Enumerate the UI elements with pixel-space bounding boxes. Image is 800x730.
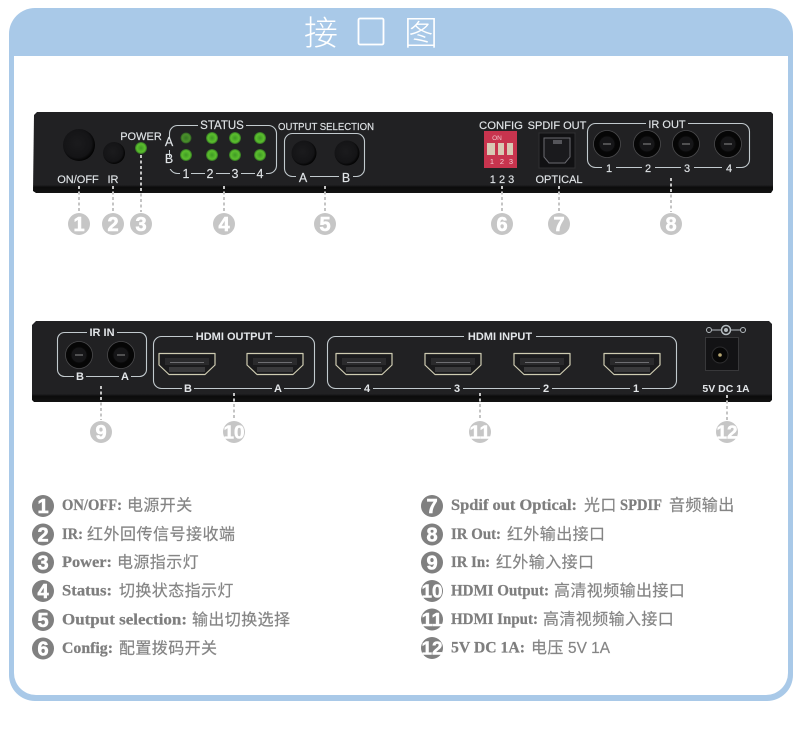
callouts: leader lines [79, 155, 727, 420]
callouts: numbered markers [68, 213, 738, 444]
legend item 2: IR: [62, 526, 83, 543]
group: status LEDs: 1 [183, 167, 190, 181]
legend: left column [32, 495, 290, 660]
legend item 1: ON/OFF: [62, 497, 122, 514]
group: HDMI output [154, 331, 314, 395]
group: status LEDs: A [165, 135, 174, 149]
group: HDMI input: 3 [454, 383, 460, 395]
callouts: numbered markers: 10 [224, 422, 244, 442]
callouts: numbered markers: 2 [107, 214, 119, 236]
legend item 3: 电源指示灯 [117, 554, 199, 572]
legend item 4: 4 [37, 581, 49, 603]
callouts: numbered markers: 12 [716, 422, 738, 442]
group: IR out: 2 [645, 163, 651, 175]
legend item 12: 电压 [531, 639, 564, 657]
title: 接 [304, 15, 338, 53]
group: HDMI output: B [184, 383, 192, 395]
legend item 2 [32, 524, 236, 546]
legend item 7: SPDIF [620, 497, 662, 514]
legend item 8 [421, 524, 605, 546]
group: status LEDs [162, 120, 276, 181]
legend item 7: 音频输出 [669, 496, 735, 514]
group: IR in [58, 327, 146, 383]
legend item 6: 6 [37, 638, 49, 660]
legend item 6 [32, 638, 217, 660]
switch: config: 2 [500, 157, 504, 166]
group: output selection: B [342, 171, 350, 185]
legend item 3: Power: [62, 554, 112, 571]
port: spdif optical: SPDIF OUT [528, 120, 587, 132]
panel: front device [33, 112, 773, 193]
switch: config: 3 [509, 157, 513, 166]
port: DC power: 5V DC 1A [702, 383, 750, 395]
legend item 10 [421, 580, 685, 602]
callouts: numbered markers: 7 [553, 214, 565, 236]
group: output selection: OUTPUT SELECTION [278, 121, 374, 133]
legend item 6: Config: [62, 640, 113, 657]
legend item 1: 电源开关 [127, 496, 193, 514]
legend item 7 [421, 495, 735, 518]
legend item 7: 7 [426, 496, 438, 518]
group: HDMI output: A [274, 383, 282, 395]
legend item 11: HDMI Input: [451, 611, 538, 628]
port: DC power [702, 326, 750, 395]
group: IR out: 1 [606, 163, 612, 175]
legend item 3: 3 [37, 552, 49, 574]
legend item 5: Output selection: [62, 612, 187, 628]
group: IR in: B [76, 371, 84, 383]
callouts: numbered markers: 6 [496, 214, 508, 236]
group: output selection [278, 121, 374, 185]
group: HDMI input: HDMI INPUT [468, 331, 532, 343]
group: IR out: 3 [684, 163, 690, 175]
legend item 9: IR In: [451, 554, 490, 571]
legend item 5 [32, 609, 290, 632]
indicator: power: POWER [120, 131, 162, 143]
legend item 3 [32, 552, 199, 574]
legend item 12: 12 [422, 638, 442, 658]
legend item 4: 切换状态指示灯 [119, 582, 234, 600]
legend item 5: 5 [37, 610, 49, 632]
group: IR in: IR IN [89, 327, 115, 339]
sensor: IR [103, 142, 125, 186]
group: HDMI input: 4 [364, 383, 371, 395]
group: status LEDs: 3 [232, 167, 239, 181]
callouts: numbered markers: 5 [319, 214, 331, 236]
legend item 7: 光口 [584, 496, 617, 514]
switch: config [479, 120, 523, 186]
indicator: power [120, 131, 162, 154]
group: IR out: 4 [726, 163, 732, 175]
callouts: numbered markers: 4 [218, 214, 230, 236]
callouts: numbered markers: 1 [73, 214, 85, 236]
legend: right column [421, 495, 735, 659]
legend item 10: 10 [422, 582, 442, 602]
group: status LEDs: 4 [257, 167, 264, 181]
legend item 10: 高清视频输出接口 [554, 582, 685, 600]
group: status LEDs: 2 [207, 167, 214, 181]
legend item 10: HDMI Output: [451, 582, 549, 600]
legend item 12: 5V 1A [568, 640, 610, 657]
group: IR out [588, 119, 750, 175]
legend item 9: 红外输入接口 [496, 554, 594, 572]
legend item 11: 高清视频输入接口 [543, 610, 674, 628]
group: output selection: A [299, 171, 308, 185]
group: HDMI input: 2 [543, 383, 549, 395]
legend item 2: 红外回传信号接收端 [87, 526, 236, 544]
group: HDMI output: HDMI OUTPUT [196, 331, 272, 343]
legend item 1 [32, 495, 193, 518]
title: 图 [404, 15, 438, 53]
legend item 11 [421, 608, 674, 630]
button: on/off [57, 129, 99, 186]
legend item 4: Status: [62, 582, 112, 600]
group: IR in: A [121, 371, 129, 383]
group: IR out: IR OUT [648, 119, 686, 131]
group: HDMI input: 1 [633, 383, 639, 395]
legend item 6: 配置拨码开关 [119, 640, 217, 658]
legend item 8: 8 [426, 524, 438, 546]
switch: config: CONFIG [479, 120, 523, 132]
callouts: numbered markers: 3 [135, 214, 147, 236]
title [304, 15, 438, 53]
sensor: IR: IR [108, 174, 119, 186]
button: on/off: ON/OFF [57, 174, 99, 186]
group: HDMI input [328, 331, 676, 395]
group: status LEDs: STATUS [200, 120, 244, 132]
panel: rear device [32, 321, 772, 402]
legend item 8: IR Out: [451, 526, 501, 543]
legend item 7: Spdif out Optical: [451, 497, 577, 514]
legend item 1: 1 [37, 496, 49, 518]
group: status LEDs: B [165, 152, 173, 166]
legend item 9: 9 [426, 552, 438, 574]
legend item 4 [32, 580, 234, 603]
callouts: numbered markers: 9 [95, 422, 107, 444]
legend item 9 [421, 552, 594, 574]
callouts: numbered markers: 11 [470, 422, 490, 442]
legend item 2: 2 [37, 524, 49, 546]
switch: config: 1 2 3 [490, 174, 514, 186]
port: spdif optical [528, 120, 587, 186]
switch: config: ON [492, 135, 502, 142]
legend item 5: 输出切换选择 [192, 611, 290, 629]
switch: config: 1 [490, 157, 494, 166]
legend item 12 [421, 637, 610, 659]
legend item 12: 5V DC 1A: [451, 640, 525, 656]
legend item 11: 11 [422, 610, 442, 630]
legend item 8: 红外输出接口 [507, 526, 605, 544]
port: spdif optical: OPTICAL [535, 174, 583, 186]
callouts: numbered markers: 8 [665, 214, 677, 236]
